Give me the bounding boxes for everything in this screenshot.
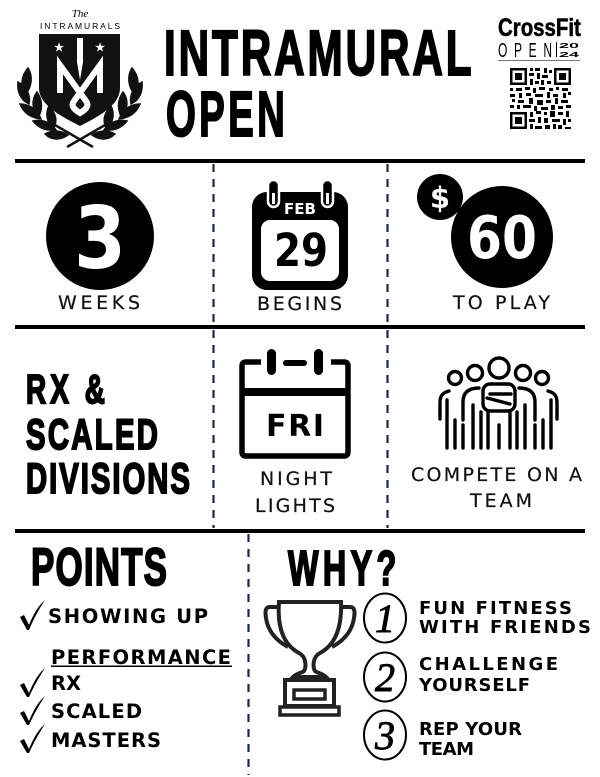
divider rules — [15, 159, 585, 533]
icon: calendar Feb 29: FEB — [284, 200, 316, 218]
stat: $60 to play: TO PLAY — [452, 292, 550, 314]
QR code — [510, 68, 571, 129]
reason 3: 3 — [374, 713, 395, 758]
list: points: SCALED — [51, 700, 142, 723]
stat: 3 weeks: 3 — [74, 189, 126, 289]
title: INTRAMURAL — [164, 18, 472, 89]
list: points: SHOWING UP — [48, 605, 208, 628]
logo: The Intramurals crest: ★ — [95, 42, 105, 54]
stat: 3 weeks: WEEKS — [58, 292, 140, 314]
icon: calendar Feb 29 — [252, 180, 348, 315]
logo: CrossFit Open 2024: 20 — [559, 41, 579, 50]
logo: CrossFit Open 2024: OPEN — [498, 40, 552, 62]
logo: The Intramurals crest: ★ — [54, 42, 64, 54]
reason 3: TEAM — [419, 739, 474, 760]
logo: The Intramurals crest — [18, 8, 142, 147]
reason 2 — [364, 652, 558, 702]
logo: CrossFit Open 2024: 24 — [559, 50, 581, 59]
reason 2: 2 — [375, 655, 395, 700]
reason 1: WITH FRIENDS — [419, 617, 591, 638]
reason 3: REP YOUR — [419, 719, 522, 740]
heading: Points: POINTS — [31, 537, 167, 597]
list: points — [20, 600, 232, 753]
heading: RX & Scaled Divisions: RX & — [26, 367, 105, 412]
logo: CrossFit Open 2024 — [498, 13, 581, 62]
logo: CrossFit Open 2024: CrossFit — [498, 13, 581, 41]
reason 3 — [364, 710, 522, 760]
icon: calendar Friday night lights: NIGHT — [260, 468, 332, 490]
title — [164, 18, 472, 151]
reason 2: YOURSELF — [418, 675, 530, 696]
label: compete on a team — [411, 464, 582, 512]
icon: calendar Feb 29: 29 — [274, 224, 328, 277]
list: why reasons — [364, 594, 591, 760]
heading: RX & Scaled Divisions — [26, 367, 190, 502]
stat: $60 to play — [417, 174, 553, 314]
reason 1 — [364, 594, 591, 642]
icon: calendar Feb 29: BEGINS — [257, 293, 342, 315]
stat: $60 to play: $ — [430, 181, 450, 215]
icon: team of people — [440, 358, 557, 448]
label: compete on a team: COMPETE ON A — [411, 464, 582, 486]
stat: $60 to play: 60 — [467, 203, 537, 272]
icon: calendar Friday night lights: FRI — [266, 409, 324, 444]
icon: calendar Friday night lights: LIGHTS — [255, 495, 335, 517]
logo: The Intramurals crest: INTRAMURALS — [40, 21, 120, 31]
icon: trophy — [265, 602, 355, 715]
dashed column separators — [214, 164, 388, 775]
stat: 3 weeks — [46, 182, 154, 314]
reason 1: FUN FITNESS — [419, 598, 572, 619]
icon: calendar Friday night lights — [242, 349, 348, 517]
title: OPEN — [166, 79, 285, 151]
reason 2: CHALLENGE — [419, 654, 558, 675]
list: points: MASTERS — [51, 729, 161, 752]
heading: RX & Scaled Divisions: SCALED — [26, 410, 158, 458]
label: compete on a team: TEAM — [469, 490, 532, 512]
reason 1: 1 — [375, 596, 395, 641]
heading: Why?: WHY? — [288, 540, 396, 596]
list: points: RX — [51, 672, 81, 695]
logo: The Intramurals crest: The — [72, 8, 88, 20]
list: points: PERFORMANCE — [51, 646, 231, 669]
heading: RX & Scaled Divisions: DIVISIONS — [26, 454, 190, 502]
